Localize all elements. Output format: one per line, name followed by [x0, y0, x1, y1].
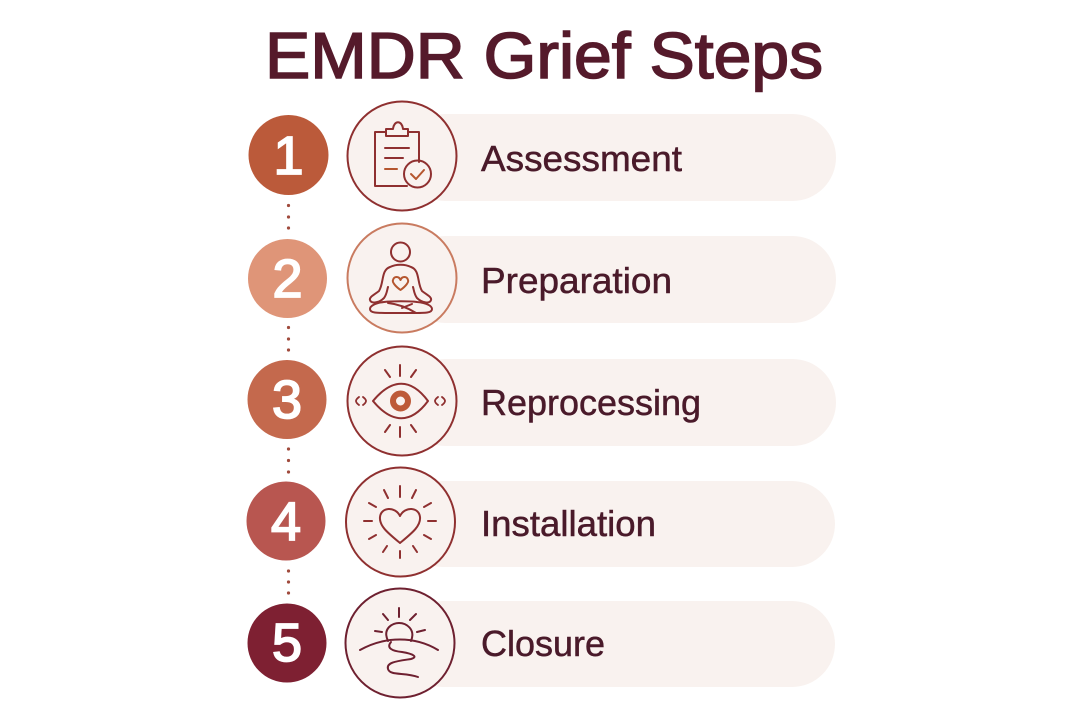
connector: dots 1 to 2	[287, 204, 290, 230]
number badge 1	[248, 115, 328, 195]
connector: dots 2 to 3	[287, 326, 290, 352]
step 1: Assessment	[248, 102, 836, 210]
step 2: Preparation	[248, 224, 836, 332]
number badge 4	[246, 482, 326, 560]
icon: eye with rays	[348, 346, 456, 456]
label: Closure: Closure	[481, 623, 605, 664]
number badge 1: 1	[273, 126, 304, 186]
label: Assessment: Assessment	[481, 138, 682, 179]
number badge 5: 5	[272, 613, 302, 673]
icon: glowing heart	[346, 468, 455, 576]
title: EMDR Grief Steps	[265, 19, 823, 92]
pill 3	[402, 359, 836, 446]
pill 4	[400, 481, 835, 567]
number badge 3: 3	[272, 370, 302, 430]
icon: meditating figure with heart	[348, 224, 456, 332]
icon: sunrise over winding path	[346, 588, 454, 698]
pill 1	[402, 114, 836, 201]
label: Installation: Installation	[481, 503, 656, 544]
icon: clipboard with check	[348, 102, 456, 210]
step 4: Installation	[246, 468, 835, 576]
number badge 2	[248, 239, 327, 318]
pill 2	[402, 236, 836, 323]
step 5: Closure	[248, 588, 835, 698]
connector: dots 3 to 4	[287, 447, 290, 474]
label: Reprocessing: Reprocessing	[481, 382, 701, 423]
number badge 2: 2	[272, 249, 303, 309]
connector: dots 4 to 5	[287, 569, 290, 595]
number badge 3	[248, 360, 326, 439]
label: Preparation: Preparation	[481, 260, 672, 301]
pill 5	[400, 601, 835, 687]
step 3: Reprocessing	[248, 346, 836, 456]
number badge 5	[248, 604, 326, 682]
number badge 4: 4	[271, 492, 301, 552]
